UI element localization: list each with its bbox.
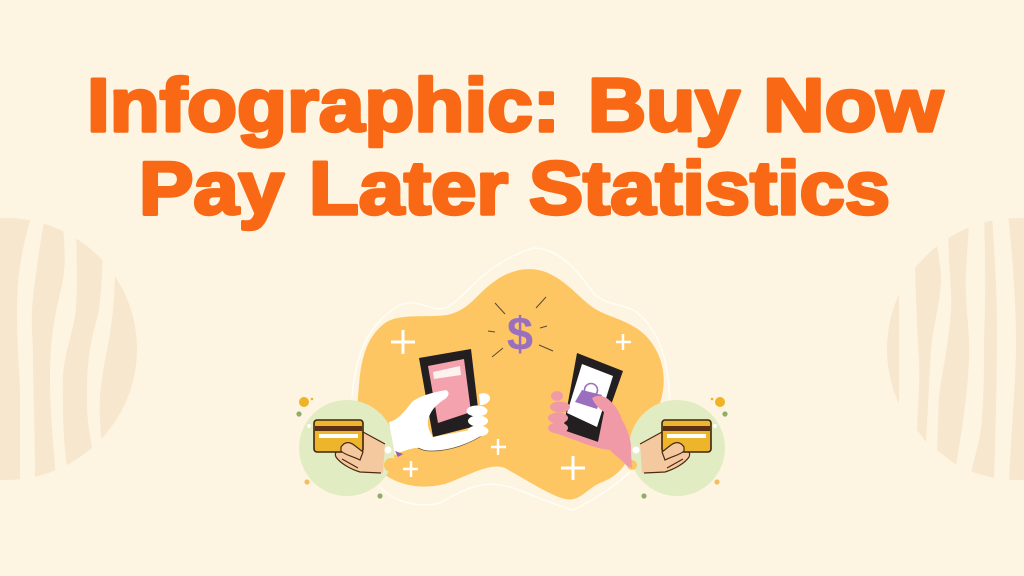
thumb — [341, 443, 363, 460]
pink hand — [549, 396, 632, 468]
decorative dots — [296, 397, 728, 499]
right hand holding credit card — [640, 420, 711, 473]
yellow blob — [358, 269, 664, 499]
left phone in white hand — [389, 349, 490, 457]
title — [87, 63, 944, 230]
green circle right — [629, 400, 725, 496]
screen — [567, 364, 613, 427]
title: Infographic: — [87, 63, 560, 147]
right phone in pink hand — [548, 353, 632, 468]
title: Pay — [139, 146, 284, 230]
green circle left — [299, 400, 395, 496]
white hand — [389, 390, 486, 455]
plus signs — [391, 330, 631, 480]
credit card — [314, 420, 363, 452]
blob edge bumps — [384, 458, 637, 472]
title: Statistics — [529, 146, 890, 230]
blob outline — [352, 248, 670, 510]
title: Buy — [588, 63, 740, 147]
title: Now — [763, 63, 944, 147]
phone screen — [428, 359, 471, 423]
left hand holding credit card — [314, 420, 385, 473]
shopping bag — [584, 384, 598, 396]
decorative striped circle right — [880, 215, 1024, 480]
illustration: buy now pay later payment scene — [296, 248, 728, 510]
sparkle rays — [488, 297, 553, 357]
decorative striped circle left — [0, 215, 140, 480]
phone — [419, 349, 480, 437]
title: Later — [309, 146, 508, 230]
hand — [335, 430, 385, 473]
phone — [563, 353, 623, 442]
infographic canvas — [0, 74, 1024, 511]
dollar sign: $ — [507, 307, 533, 360]
